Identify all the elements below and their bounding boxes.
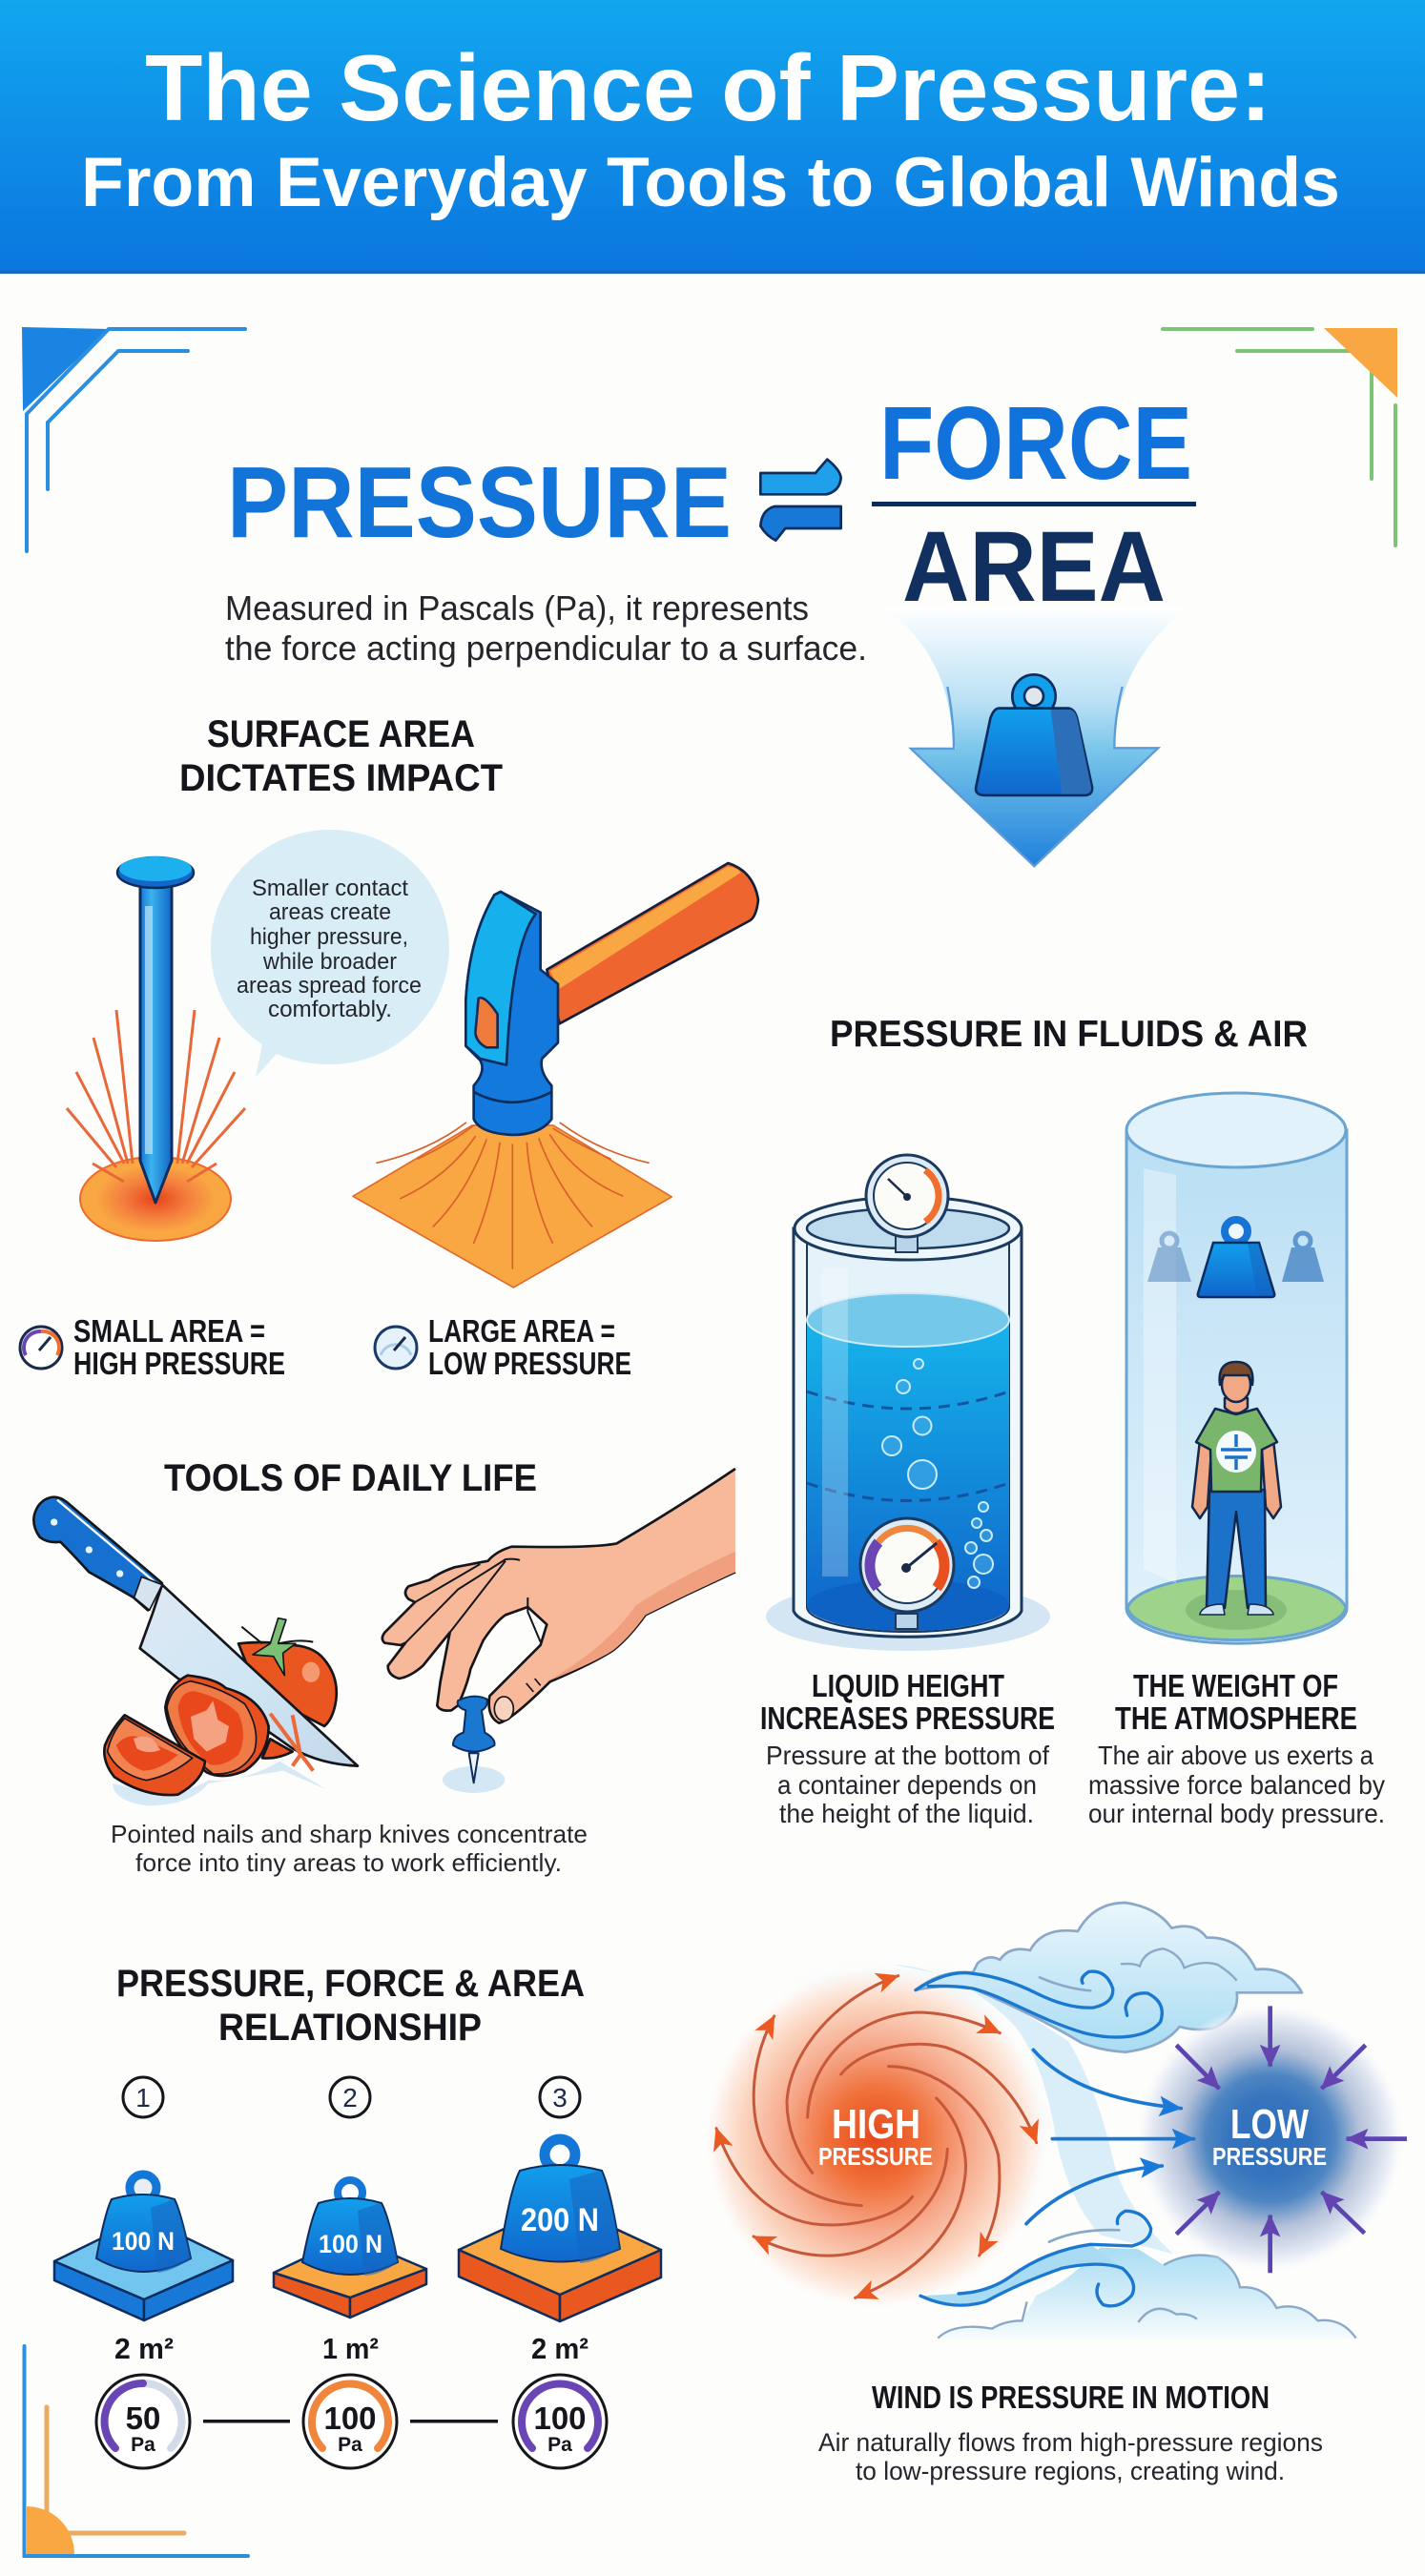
shadow: [113, 1762, 326, 1805]
bottom gauge: [860, 1518, 954, 1629]
formula description: the force acting perpendicular to a surface.: [225, 629, 867, 668]
word: area: AREA: [902, 511, 1166, 623]
impact ellipse: [80, 1157, 231, 1241]
top gauge: [866, 1155, 948, 1252]
weight: 200 N: [521, 2202, 599, 2238]
word: pressure: PRESSURE: [227, 446, 732, 559]
text block: weight of atmosphere: THE ATMOSPHERE: [1115, 1700, 1357, 1736]
heading: relationship: [116, 1963, 585, 2049]
label: low pressure: [1212, 2101, 1327, 2171]
tomato half: [165, 1676, 269, 1776]
text block: wind: to low-pressure regions, creating wind.: [856, 2457, 1285, 2485]
icon: equilibrium arrows: [760, 460, 841, 541]
pressure dial: 100: [533, 2401, 587, 2436]
formula description: [225, 588, 867, 668]
text block: wind: Air naturally flows from high-pressure regions: [818, 2428, 1323, 2457]
icon: big down arrow with weight: [884, 608, 1189, 866]
cylinder top: [1126, 1093, 1346, 1167]
text block: liquid height: a container depends on: [777, 1770, 1037, 1800]
shoes: [1200, 1604, 1273, 1615]
text block: wind: [818, 2380, 1323, 2485]
text block: liquid height: Pressure at the bottom of: [766, 1741, 1049, 1770]
label: low pressure: LOW: [1230, 2101, 1309, 2148]
heading: pressure in fluids and air: PRESSURE IN FLUIDS & AIR: [830, 1014, 1308, 1055]
cloud: top: [916, 1903, 1302, 2052]
weight: [302, 2180, 398, 2276]
title: The Science of Pressure:: [145, 35, 1271, 140]
connector line 2: [410, 2420, 498, 2422]
wind band fill: [920, 2244, 1123, 2305]
caption: tools: Pointed nails and sharp knives concentrate: [111, 1820, 588, 1848]
push pin: [453, 1697, 495, 1783]
hammer handle: [547, 863, 758, 1023]
faded weight left: [1147, 1233, 1191, 1282]
text block: weight of atmosphere: THE WEIGHT OF: [1133, 1668, 1338, 1703]
illustration: nail: [67, 856, 245, 1241]
text block: liquid height: the height of the liquid.: [779, 1799, 1034, 1828]
text block: wind: WIND IS PRESSURE IN MOTION: [872, 2380, 1270, 2415]
heading: surface area: DICTATES IMPACT: [179, 757, 503, 799]
whole tomato: [238, 1618, 337, 1726]
cloud: bottom: [938, 2248, 1356, 2339]
speech bubble: while broader: [262, 949, 397, 975]
label: small area: [20, 1313, 285, 1381]
tank shadow: [766, 1582, 1050, 1651]
spiral arrows: [716, 1976, 1037, 2298]
illustration: hand and pin: [382, 1469, 735, 1793]
speech bubble: comfortably.: [268, 997, 392, 1022]
pressure dial: [513, 2375, 607, 2468]
tank rim: [795, 1197, 1022, 1260]
example 3: [459, 2077, 661, 2468]
force rays: [67, 1010, 245, 1182]
small tomato piece: [262, 1739, 293, 1759]
pale airflow band: [894, 1965, 1173, 2254]
pressure dial: [303, 2375, 397, 2468]
corner decoration: bottom left: [25, 2346, 248, 2556]
main weight: [1198, 1220, 1274, 1297]
label: low pressure: PRESSURE: [1212, 2142, 1327, 2171]
step number: 2: [342, 2083, 358, 2112]
shirt emblem: [1216, 1431, 1256, 1473]
text block: liquid height: LIQUID HEIGHT: [812, 1668, 1004, 1703]
caption: tools: force into tiny areas to work efficiently.: [135, 1848, 562, 1877]
knife bolster: [134, 1577, 162, 1610]
heading: relationship: RELATIONSHIP: [218, 2007, 482, 2049]
area plate: [54, 2217, 233, 2320]
arms: [1192, 1440, 1281, 1518]
step number: [330, 2077, 370, 2117]
pale haze behind high pressure: [806, 1975, 1044, 2279]
airflow arrows: [1026, 2050, 1194, 2224]
person: [1192, 1362, 1281, 1615]
heading: relationship: PRESSURE, FORCE & AREA: [116, 1963, 585, 2005]
step number: 1: [135, 2083, 151, 2112]
knife handle: [33, 1497, 162, 1610]
label: small area: HIGH PRESSURE: [73, 1346, 285, 1381]
header banner: [0, 0, 1425, 274]
pressure dial: 50: [126, 2401, 160, 2436]
nail head: [117, 857, 194, 888]
faded weight right: [1282, 1233, 1324, 1282]
inward arrows: [1176, 2006, 1407, 2273]
icon: small gauge low: [375, 1327, 417, 1369]
weight: 100 N: [319, 2230, 382, 2258]
orange spread area: [353, 1123, 671, 1288]
cylinder body: [1126, 1130, 1347, 1643]
weight: [96, 2174, 191, 2273]
corner decoration: top left: [22, 327, 245, 551]
wind swirls: [916, 1971, 1162, 2306]
speech bubble: areas spread force: [237, 973, 422, 999]
water depth lines: [807, 1391, 1009, 1501]
step number: [540, 2077, 580, 2117]
pressure dial: Pa: [131, 2434, 155, 2456]
pressure dial: Pa: [338, 2434, 362, 2456]
nail body: [140, 882, 172, 1203]
illustration: knife and tomato: [33, 1497, 358, 1805]
text block: weight of atmosphere: our internal body pressure.: [1088, 1799, 1385, 1828]
text block: liquid height: INCREASES PRESSURE: [760, 1700, 1055, 1736]
illustration: hammer: [353, 863, 758, 1288]
high pressure glow: [706, 1968, 1046, 2308]
ground: [1127, 1576, 1346, 1640]
area plate: [459, 2203, 661, 2321]
low pressure glow: [1137, 2005, 1404, 2272]
speech bubble: higher pressure,: [250, 924, 408, 950]
caption: tools: [111, 1820, 588, 1877]
title: [81, 35, 1340, 221]
label: high pressure: PRESSURE: [818, 2142, 933, 2171]
formula description: Measured in Pascals (Pa), it represents: [225, 588, 809, 628]
text block: weight of atmosphere: [1088, 1668, 1385, 1828]
connector line 1: [203, 2420, 290, 2422]
area label: 2 m²: [531, 2332, 589, 2365]
title: From Everyday Tools to Global Winds: [81, 144, 1340, 221]
knife blade: [140, 1585, 358, 1766]
text block: weight of atmosphere: The air above us exerts a: [1098, 1741, 1373, 1770]
tank shell: [794, 1228, 1022, 1637]
example 2: [274, 2077, 426, 2468]
label: large area: LARGE AREA =: [428, 1313, 615, 1349]
area label: 1 m²: [322, 2332, 379, 2365]
fraction bar: [872, 502, 1196, 506]
example 1: [54, 2077, 233, 2468]
weight: [501, 2139, 620, 2263]
cut sparks: [270, 1714, 313, 1771]
area label: 2 m²: [114, 2332, 174, 2365]
label: high pressure: [818, 2101, 933, 2171]
high pressure system: [706, 1968, 1046, 2308]
icon: small gauge high: [20, 1327, 62, 1369]
shirt: [1196, 1409, 1277, 1492]
low pressure system and clouds: [894, 1903, 1407, 2339]
label: large area: LOW PRESSURE: [428, 1346, 631, 1381]
wind diagram: [706, 1903, 1407, 2339]
corner decoration: top right: [1163, 328, 1397, 546]
weight: 100 N: [112, 2227, 175, 2256]
pants: [1207, 1490, 1266, 1608]
pressure dial: 100: [323, 2401, 377, 2436]
hand: [382, 1469, 735, 1723]
label: large area: [375, 1313, 631, 1381]
formula: pressure = force / area: [227, 385, 1196, 623]
step number: [123, 2077, 163, 2117]
heading: surface area: SURFACE AREA: [207, 713, 475, 755]
icon: weight: [976, 674, 1092, 795]
speech bubble: [211, 830, 449, 1077]
pressure dial: [96, 2375, 190, 2468]
text block: weight of atmosphere: massive force balanced by: [1088, 1770, 1385, 1800]
head: [1225, 1398, 1248, 1413]
speech bubble: areas create: [269, 899, 391, 925]
water: [807, 1293, 1009, 1631]
illustration: atmosphere cylinder: [1126, 1093, 1347, 1643]
label: small area: SMALL AREA =: [73, 1313, 265, 1349]
text block: liquid height: [760, 1668, 1055, 1828]
heading: surface area: [179, 713, 503, 799]
step number: 3: [552, 2083, 568, 2112]
push pin shadow: [443, 1766, 505, 1793]
area plate: [274, 2236, 426, 2318]
bubbles: [882, 1359, 993, 1588]
tomato wedge: [104, 1715, 205, 1795]
pressure dial: Pa: [547, 2434, 572, 2456]
label: high pressure: HIGH: [832, 2101, 920, 2148]
hammer head: [465, 892, 558, 1135]
word: force: FORCE: [879, 385, 1192, 502]
illustration: liquid tank: [766, 1155, 1050, 1651]
heading: tools of daily life: TOOLS OF DAILY LIFE: [164, 1457, 537, 1499]
speech bubble: Smaller contact: [252, 876, 408, 901]
